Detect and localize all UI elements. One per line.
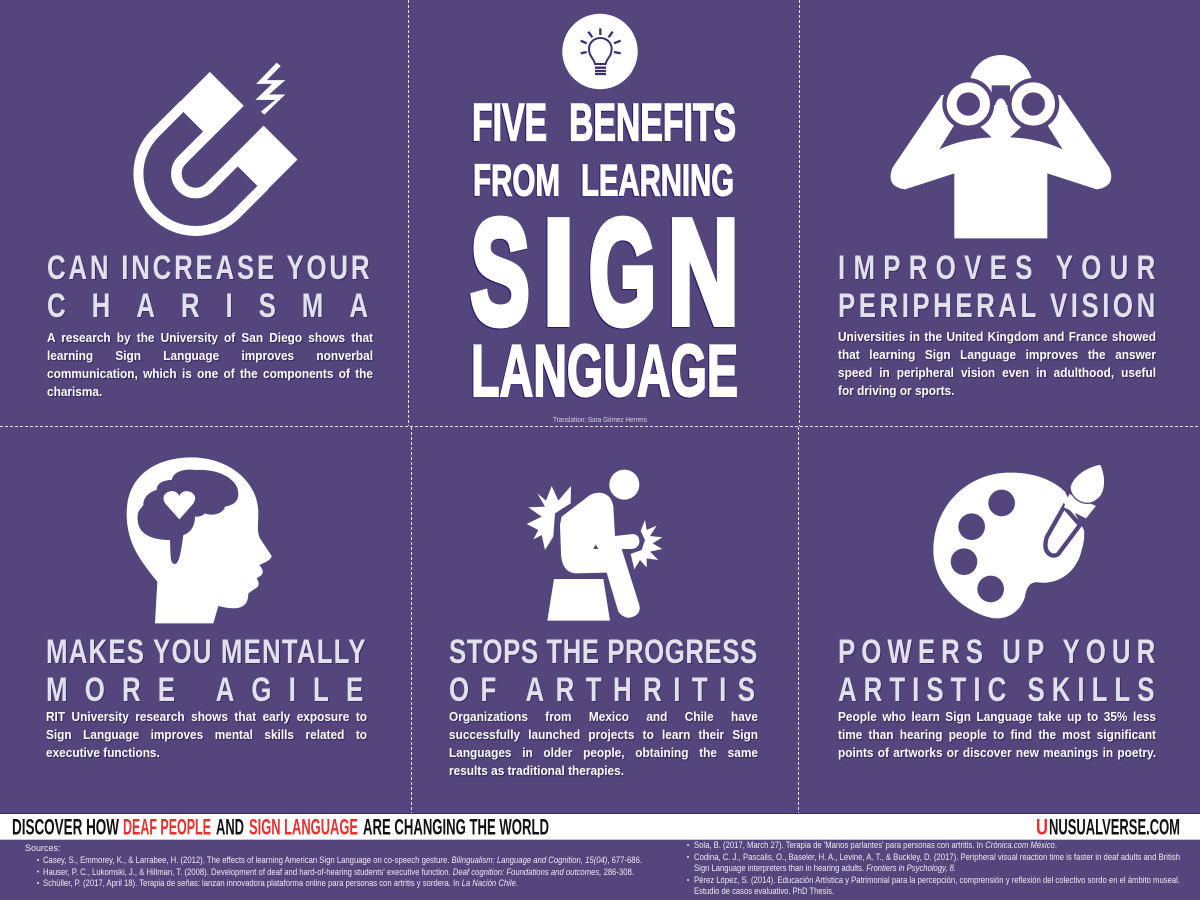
panel: peripheral vision <box>838 55 1157 399</box>
text: mentally agile <box>46 710 368 760</box>
sources: right column: Sign Language interpreters than in hearing adults. Frontiers in Psychology, 8. <box>694 863 956 873</box>
text: charisma: learning Sign Language improves nonverbal <box>47 349 373 363</box>
text: mentally agile: Sign Language improves mental skills related to <box>46 728 367 742</box>
text: charisma <box>47 331 374 399</box>
text: artistic skills: People who learn Sign Language take up to 35% less <box>838 710 1156 724</box>
text: charisma: charisma. <box>47 385 102 399</box>
icon: seated person with joint pain <box>527 470 662 621</box>
heading: powers up your artistic skills <box>838 632 1155 709</box>
title: five benefits from learning sign language: G <box>589 190 656 355</box>
heading: stops the progress of arthritis <box>449 632 757 709</box>
heading: improves your peripheral vision: IMPROVES YOUR <box>838 248 1155 287</box>
sources: left column: Casey, S., Emmorey, K., & Larrabee, H. (2012). The effects of learning American Sign Language on co-speech gesture. Bilingualism: Language and Cognition, 15(04), 677-686. <box>43 855 642 865</box>
text: arthritis: results as traditional therapies. <box>449 764 624 778</box>
heading: makes you mentally more agile: MAKES YOU MENTALLY <box>46 632 366 671</box>
icon: person with binoculars <box>891 55 1111 238</box>
heading: makes you mentally more agile <box>46 632 366 709</box>
sources: left column: Sources: <box>25 843 61 853</box>
icon: head with brain and heart <box>127 457 272 623</box>
title: five benefits from learning sign language: FIVE <box>472 94 547 152</box>
banner slogan <box>12 814 549 840</box>
text: mentally agile: executive functions. <box>46 746 160 760</box>
text: mentally agile: RIT University research shows that early exposure to <box>46 710 367 724</box>
panel: title <box>469 14 738 424</box>
title: five benefits from learning sign language <box>470 94 738 412</box>
heading: makes you mentally more agile: MORE AGILE <box>46 670 363 709</box>
icon: lightbulb <box>562 14 638 89</box>
text: peripheral vision <box>838 330 1157 399</box>
title: five benefits from learning sign language: LANGUAGE <box>471 331 738 412</box>
heading: stops the progress of arthritis: STOPS THE PROGRESS <box>449 632 757 671</box>
heading: improves your peripheral vision <box>838 248 1155 325</box>
sources: right column: Estudio de casos evaluativo. PhD Thesis. <box>694 886 834 896</box>
sources: right column: Sola, B. (2017, March 27). Terapia de 'Manos parlantes' para personas con artritis. In Crónica.com México. <box>694 840 1057 850</box>
title: five benefits from learning sign language: S <box>470 190 530 355</box>
panel: artistic skills <box>838 464 1157 761</box>
banner slogan: AND <box>216 814 244 840</box>
website: U <box>1036 814 1048 840</box>
text: peripheral vision: speed in peripheral vision even in adulthood, useful <box>838 366 1156 380</box>
title: five benefits from learning sign language: FROM <box>473 156 560 206</box>
heading: stops the progress of arthritis: OF ARTHRITIS <box>449 670 755 709</box>
text: arthritis <box>449 710 759 779</box>
text: peripheral vision: that learning Sign Language improves the answer <box>838 348 1156 362</box>
text: artistic skills <box>838 710 1157 761</box>
text: arthritis: Organizations from Mexico and Chile have <box>449 710 758 724</box>
text: arthritis: Languages in older people, obtaining the same <box>449 746 758 760</box>
banner slogan: DISCOVER HOW <box>12 814 119 840</box>
text: peripheral vision: for driving or sports. <box>838 384 954 398</box>
icon: palette and brush <box>933 464 1105 618</box>
heading: can increase your charisma <box>47 248 370 325</box>
sources: right column <box>687 840 1180 896</box>
panel: arthritis <box>449 470 759 779</box>
title: five benefits from learning sign language: N <box>668 190 738 355</box>
title: five benefits from learning sign language: I <box>543 190 574 355</box>
banner slogan: DEAF PEOPLE <box>123 814 211 840</box>
title: five benefits from learning sign language: BENEFITS <box>569 94 736 152</box>
icon: magnet <box>111 63 298 258</box>
credit: translation: Translation: Sara Gómez Herrero <box>553 417 647 424</box>
banner slogan: SIGN LANGUAGE <box>249 814 358 840</box>
text: charisma: communication, which is one of the components of the <box>47 367 373 381</box>
sources: left column: Schüller, P. (2017, April 18). Terapia de señas: lanzan innovadora plataforma online para personas con artritis y sordera. In La Nación Chile. <box>43 878 518 888</box>
text: peripheral vision: Universities in the United Kingdom and France showed <box>838 330 1156 344</box>
text: charisma: A research by the University of San Diego shows that <box>47 331 373 345</box>
text: arthritis: successfully launched projects to learn their Sign <box>449 728 758 742</box>
heading: powers up your artistic skills: POWERS UP YOUR <box>838 632 1155 671</box>
heading: improves your peripheral vision: PERIPHERAL VISION <box>838 286 1155 325</box>
heading: powers up your artistic skills: ARTISTIC SKILLS <box>838 670 1155 709</box>
heading: can increase your charisma: CHARISMA <box>47 286 368 325</box>
title: five benefits from learning sign language: LEARNING <box>581 156 734 206</box>
sources: left column: Hauser, P. C., Lukomski, J., & Hillman, T. (2008). Development of deaf and hard-of-hearing students' executive function. Deaf cognition: Foundations and outcomes, 286-308. <box>43 867 634 877</box>
panel: mentally agile <box>46 457 368 760</box>
panel: charisma <box>47 62 374 399</box>
text: artistic skills: time than hearing people to find the most significant <box>838 728 1156 742</box>
heading: can increase your charisma: CAN INCREASE YOUR <box>47 248 370 287</box>
sources: left column <box>25 843 642 888</box>
banner slogan: ARE CHANGING THE WORLD <box>363 814 549 840</box>
text: artistic skills: points of artworks or discover new meanings in poetry. <box>838 746 1156 760</box>
footer banner <box>0 813 1200 840</box>
